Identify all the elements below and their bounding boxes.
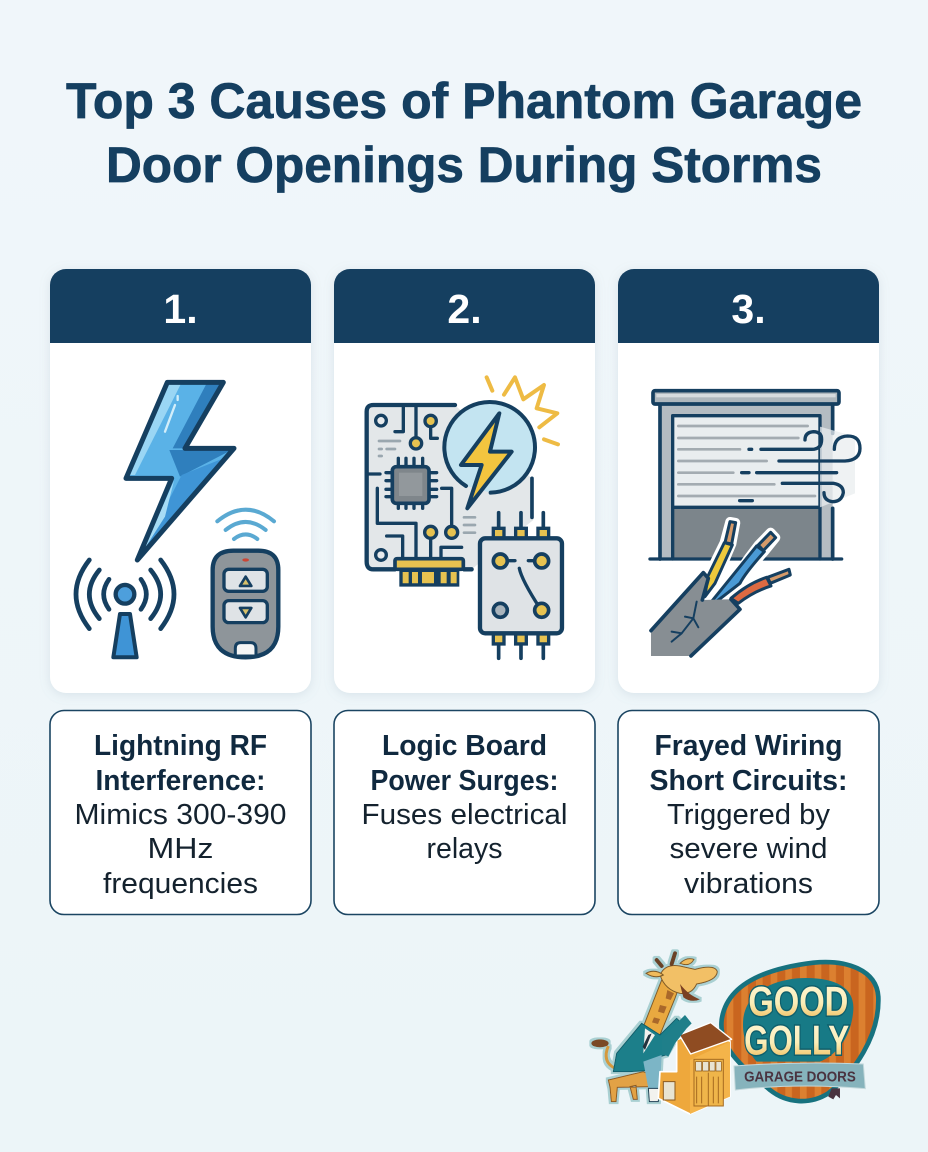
icon: remote control (213, 510, 278, 657)
icon: chip (386, 458, 437, 508)
icon: lightning bolt (126, 382, 234, 560)
number 3: 3. (731, 286, 766, 332)
icon: antenna with radio waves (76, 560, 174, 657)
panel: cause 2 card (334, 269, 595, 693)
icon: wind lines (740, 427, 860, 507)
suit (613, 1018, 683, 1072)
panel: cause 1 description (50, 710, 311, 914)
panel: cause 3 description: vibrations (684, 868, 813, 900)
icon: frayed wires (651, 522, 790, 656)
panel: cause 1 description: Lightning RF (94, 730, 267, 762)
panel: cause 3 description: Short Circuits: (650, 765, 848, 797)
wordmark: GOOD (748, 977, 848, 1024)
icon: garage door, wind and frayed wires (650, 391, 860, 656)
ribbon (734, 1063, 865, 1090)
icon: garage door (650, 391, 842, 559)
icon: surge circle with bolt (444, 377, 558, 508)
panel: cause 1 description: frequencies (103, 868, 258, 900)
panel: cause 1 card (50, 269, 311, 693)
tail (606, 1046, 615, 1068)
number 2: 2. (447, 286, 482, 332)
logo badge (721, 962, 878, 1101)
panel: cause 2 description (334, 710, 595, 914)
panel: cause 2 description: Logic Board (382, 730, 547, 762)
wordmark (744, 977, 849, 1064)
panel: cause 3 description (618, 710, 879, 914)
icon: logic board (367, 405, 533, 587)
panel: cause 1 description: MHz (148, 833, 214, 865)
icon: lightning, antenna and remote (76, 382, 278, 657)
panel: cause 1 description: Interference: (96, 765, 266, 797)
giraffe mascot (591, 953, 717, 1102)
little house (658, 1015, 732, 1114)
title: Top 3 Causes of Phantom Garage (66, 73, 862, 129)
ribbon: GARAGE DOORS (744, 1070, 856, 1086)
panel: cause 3 description: Triggered by (667, 799, 830, 831)
wordmark: GOLLY (744, 1017, 849, 1064)
panel: cause 2 description: Power Surges: (370, 765, 558, 797)
title: Door Openings During Storms (106, 137, 822, 193)
neck (643, 980, 682, 1035)
icon: connector (395, 559, 463, 587)
number 1: 1. (163, 286, 198, 332)
logo: Good Golly Garage Doors (591, 953, 878, 1114)
panel: cause 2 description: relays (426, 833, 502, 865)
stool (608, 1072, 655, 1102)
title (66, 73, 862, 193)
panel: cause 3 description: Frayed Wiring (654, 730, 842, 762)
icon: relay (480, 478, 562, 658)
panel: cause 3 description: severe wind (670, 833, 828, 865)
head (660, 966, 717, 994)
panel: cause 1 description: Mimics 300-390 (74, 799, 286, 831)
panel: cause 2 description: Fuses electrical (362, 799, 568, 831)
icon: circuit board, surge and relay (367, 377, 562, 658)
panel: cause 3 card (618, 269, 879, 693)
